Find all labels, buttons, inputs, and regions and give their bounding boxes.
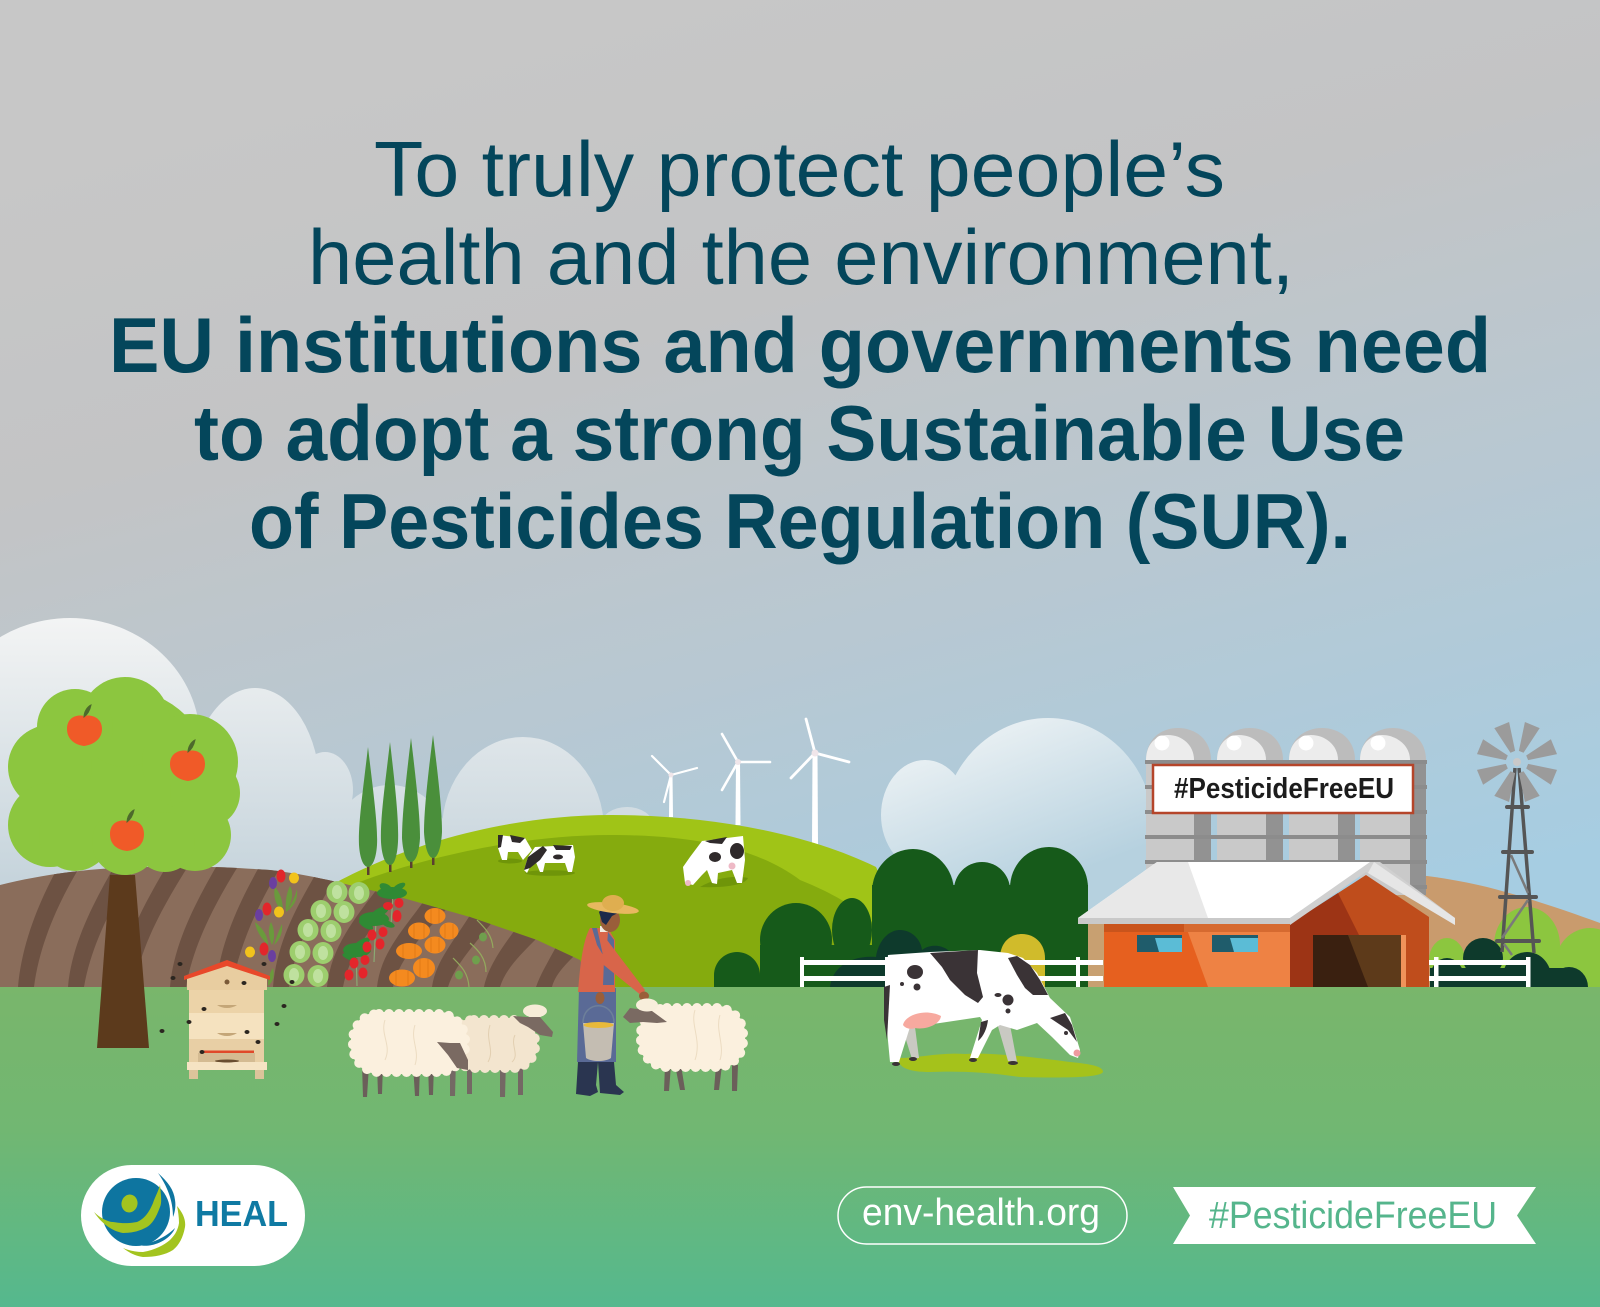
cabbage row: [284, 881, 370, 987]
sheep: right: [623, 998, 745, 1091]
beehive: [184, 960, 270, 1079]
farmer: [576, 895, 649, 1096]
small cows on the hill: [498, 835, 748, 887]
right bushes: [1429, 907, 1600, 1007]
title: [109, 125, 1491, 565]
dark teal and yellow bushes: [830, 930, 1045, 987]
apple tree: [8, 677, 240, 1048]
cypress trees: [359, 735, 442, 875]
dark green bushes: [714, 847, 1088, 998]
hashtag banner: [1173, 1187, 1536, 1244]
pumpkin row: [389, 908, 458, 986]
grazing cow: [884, 950, 1103, 1077]
far brown hill: [1380, 876, 1600, 987]
HEAL logo: [81, 1165, 305, 1266]
green hill: [337, 815, 930, 987]
silos: [1145, 728, 1427, 895]
bees: [160, 962, 294, 1054]
ploughed field: [0, 860, 592, 987]
title: health and the environment,: [308, 213, 1294, 301]
wind turbines: [652, 719, 849, 845]
title: to adopt a strong Sustainable Use: [194, 389, 1405, 477]
right fence: [1429, 957, 1530, 987]
ground: [0, 987, 1600, 1307]
HEAL logo: HEAL: [195, 1193, 288, 1234]
clouds: [0, 618, 1154, 942]
barn: [1078, 862, 1455, 987]
left fence: [800, 957, 1103, 987]
vine row: [453, 920, 493, 987]
silo sign: #PesticideFreeEU: [1174, 773, 1394, 805]
website pill: env-health.org: [862, 1192, 1100, 1234]
tulip row: [245, 870, 299, 986]
title: To truly protect people’s: [374, 125, 1225, 213]
title: of Pesticides Regulation (SUR).: [249, 477, 1351, 565]
windmill: [1477, 722, 1557, 955]
sheep: left pair: [351, 1004, 553, 1097]
website pill: [838, 1187, 1127, 1244]
silo sign: [1153, 765, 1413, 813]
title: EU institutions and governments need: [109, 301, 1491, 389]
hashtag banner: #PesticideFreeEU: [1209, 1195, 1497, 1237]
pepper row: [341, 881, 407, 986]
logo mark: [94, 1173, 185, 1257]
